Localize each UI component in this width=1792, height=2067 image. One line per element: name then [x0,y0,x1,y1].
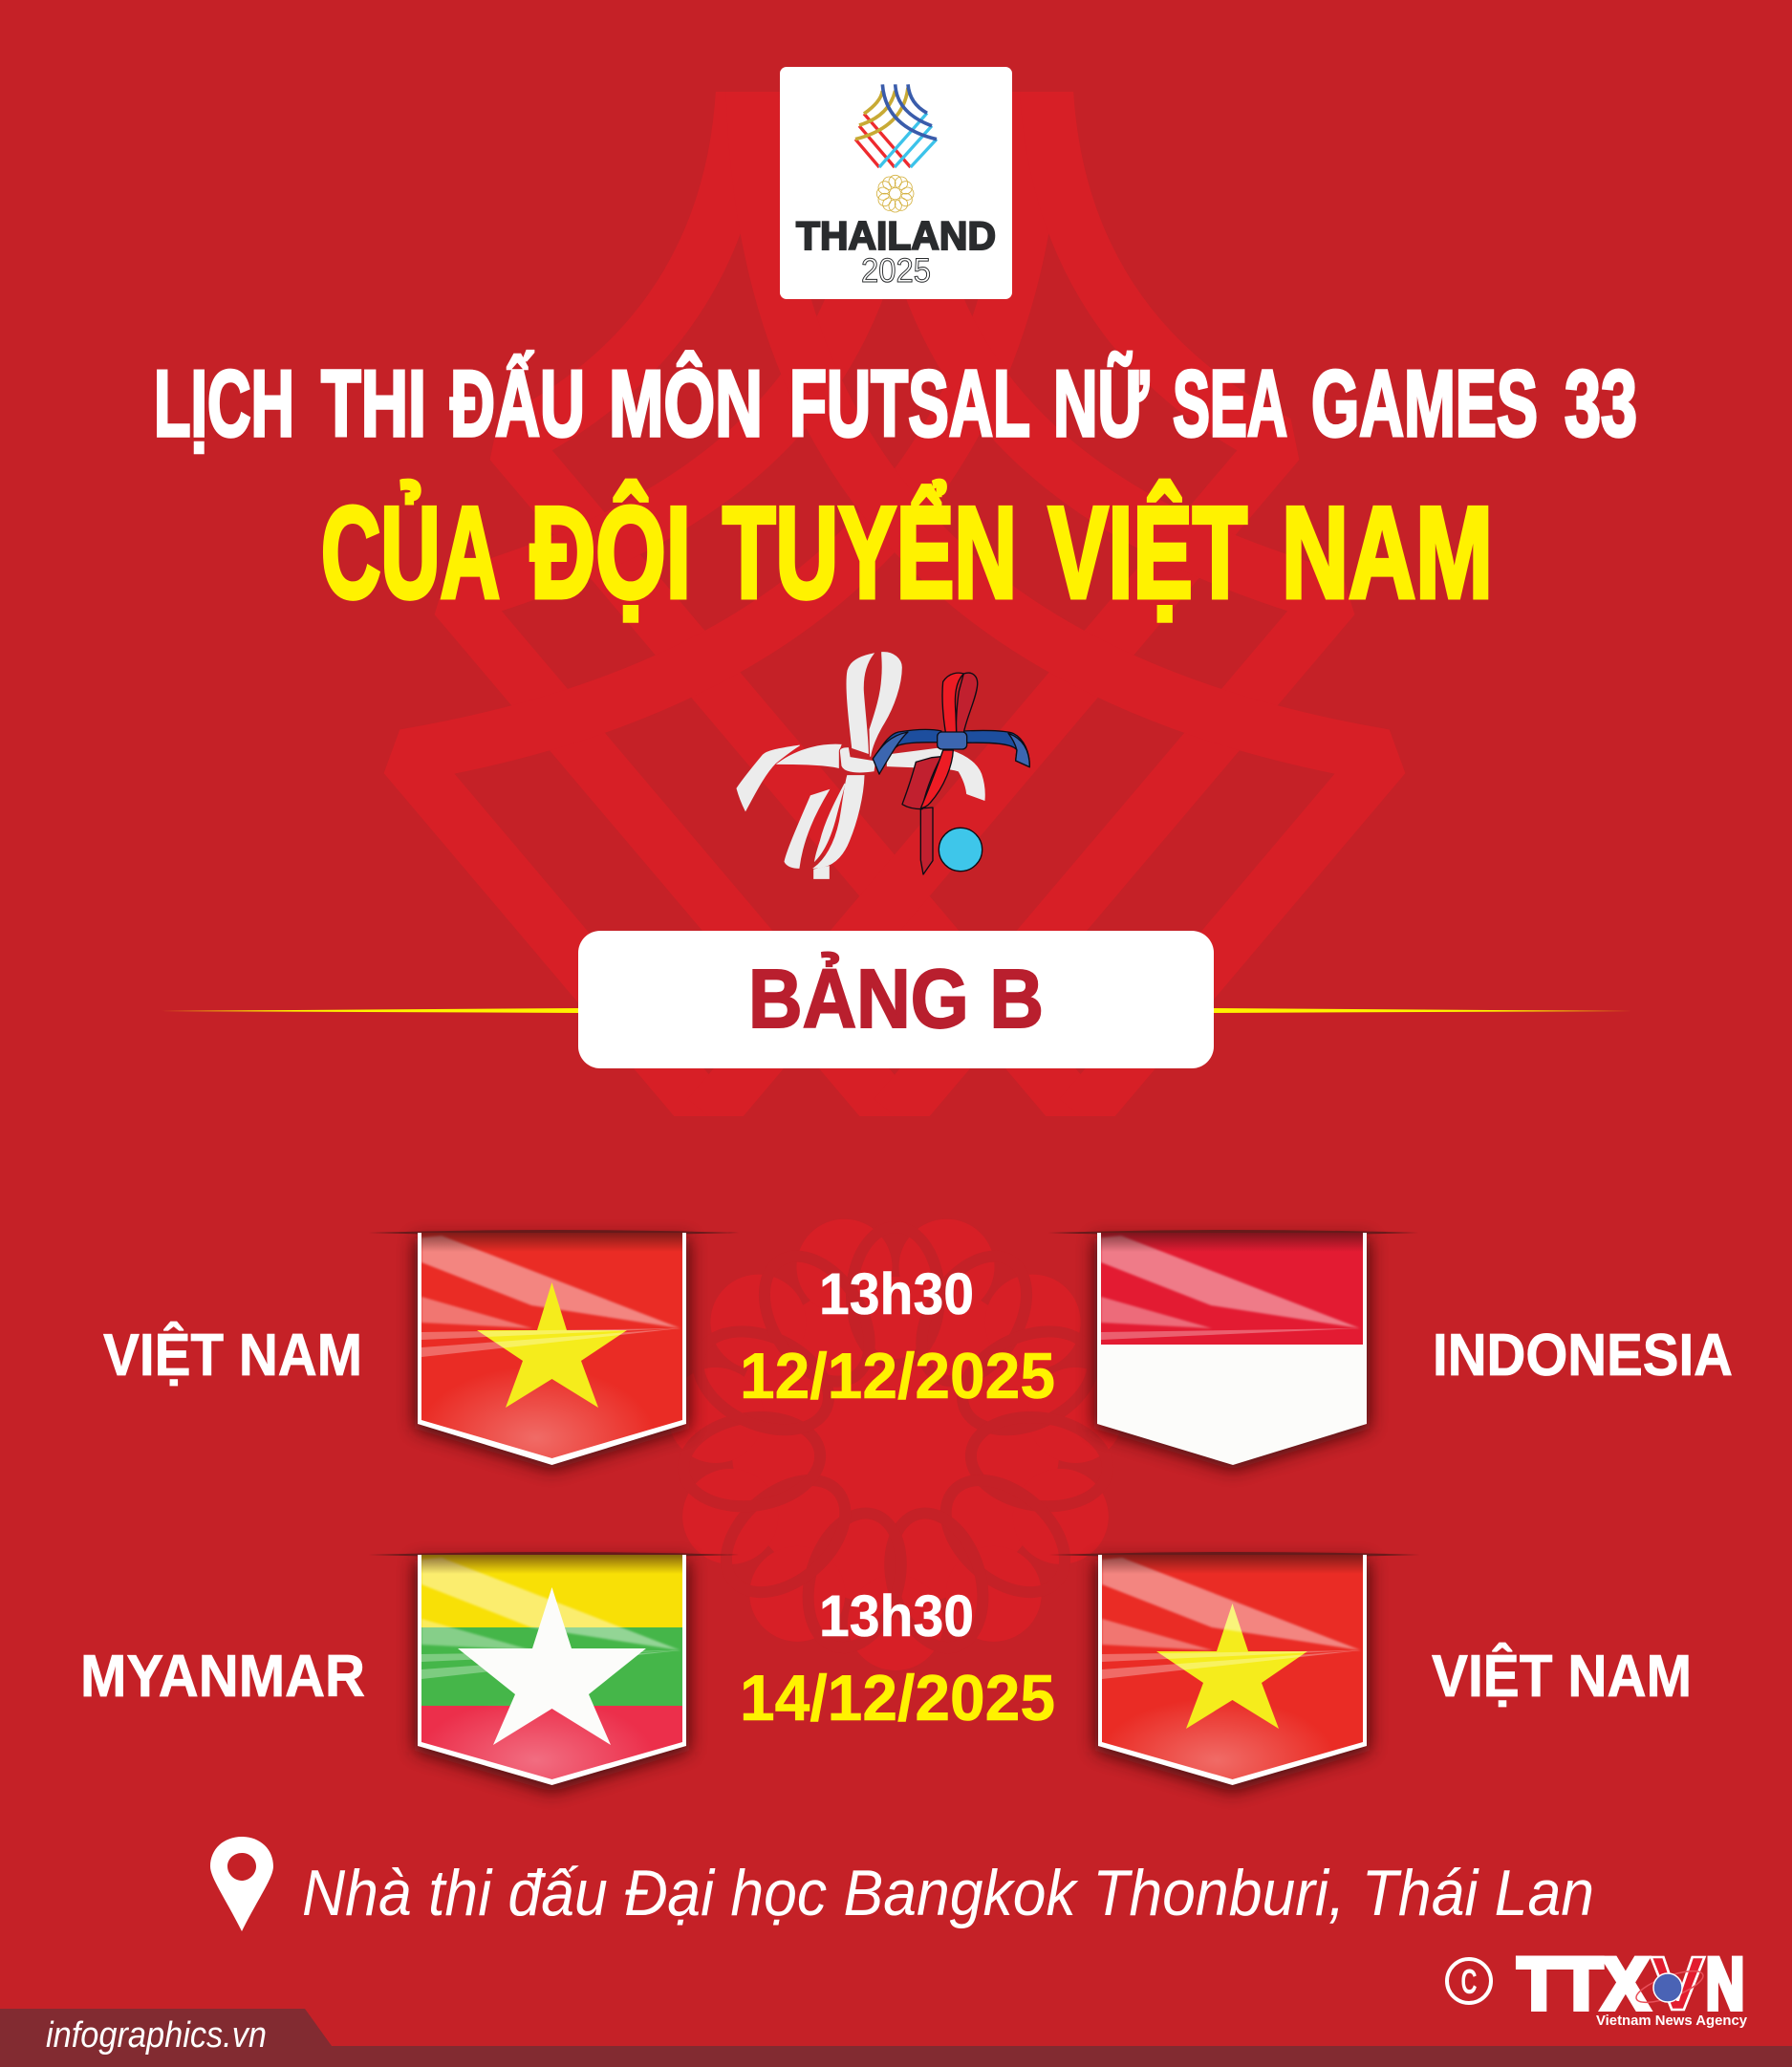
logo wordmark: THAILAND [796,213,996,258]
team label: Việt Nam: VIỆT NAM [1432,1644,1692,1710]
logo year: 2025 [861,252,931,290]
match date: 14/12/2025 [740,1662,1055,1734]
group label: Bảng B: BẢNG B [748,953,1044,1045]
title line 2 [321,480,1493,625]
venue text: Nhà thi đấu Đại học Bangkok Thonburi, Thái Lan [302,1857,1594,1929]
title line 1: LỊCH [154,351,294,456]
team label: Myanmar: MYANMAR [80,1644,365,1710]
divider line left [161,1008,578,1013]
copyright symbol [1447,1959,1491,2003]
title line 2: TUYỂN [723,480,1017,625]
icon: globe [1632,1965,1707,2009]
title line 1: THI [321,351,426,456]
footer bar [0,2009,1792,2067]
background pattern: flower emblem [661,1208,1130,1670]
group label: Bảng B [578,931,1214,1068]
logo: TTXVN [1518,1941,1748,2029]
title line 1: MÔN [609,351,763,456]
icon: location pin [210,1837,273,1931]
team label: Indonesia: INDONESIA [1433,1323,1733,1389]
title line 2: CỦA [321,480,500,625]
match 2 [80,1552,1692,1822]
flag: Vietnam [369,1230,739,1510]
team label: Việt Nam: VIỆT NAM [103,1323,362,1389]
copyright symbol: C [1460,1962,1478,2001]
flag: Myanmar [369,1552,739,1822]
title line 2: VIỆT [1048,480,1247,625]
title line 2: NAM [1282,480,1493,625]
flag: Indonesia [1048,1230,1418,1470]
title line 1: GAMES [1311,351,1538,456]
title line 1: 33 [1565,351,1637,456]
title line 1: ĐẤU [450,351,585,456]
title line 1: FUTSAL [789,351,1030,456]
background pattern: games emblem lattice [404,57,1385,1116]
title line 2: ĐỘI [530,480,691,625]
title line 1 [154,351,1637,456]
logo: TTXVN: TTX [1518,1944,1649,2025]
divider line right [1214,1008,1632,1013]
icon: games emblem [855,84,937,212]
logo: TTXVN: V [1651,1941,1705,2026]
footer site name: infographics.vn [46,2015,267,2056]
match 1 [103,1230,1733,1510]
agency name: Vietnam News Agency [1596,2013,1748,2029]
match date: 12/12/2025 [740,1340,1055,1412]
logo: Thailand 2025 [780,67,1012,299]
flag: Vietnam [1049,1552,1419,1822]
title line 1: SEA [1173,351,1287,456]
title line 1: NỮ [1053,351,1149,456]
icon: futsal ribbons pictogram [737,653,1029,878]
kickoff time: 13h30 [819,1261,974,1326]
kickoff time: 13h30 [819,1583,974,1648]
logo: TTXVN: N [1706,1944,1744,2025]
